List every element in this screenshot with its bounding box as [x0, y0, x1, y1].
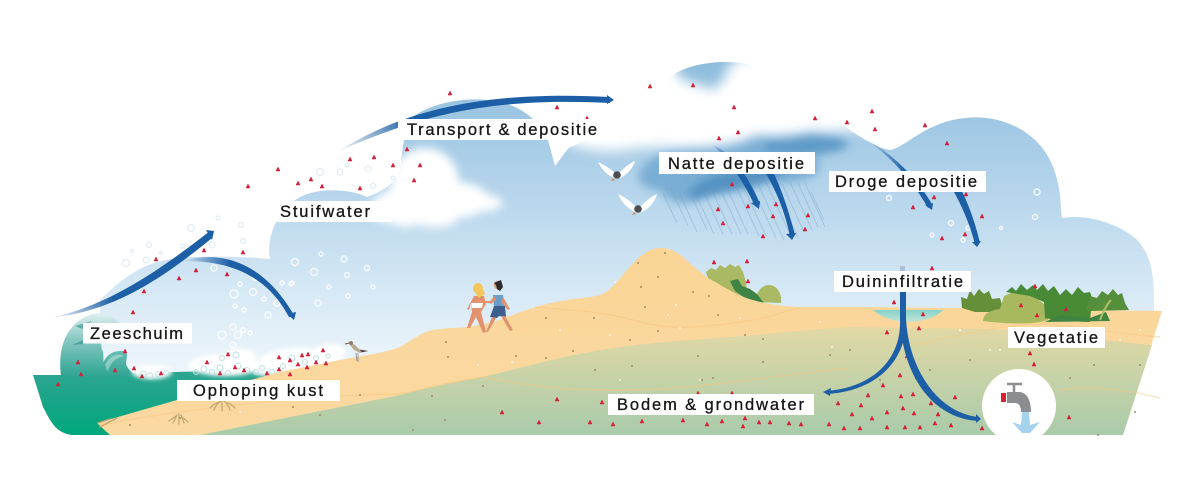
woman	[467, 283, 492, 333]
sea foam on shore	[132, 344, 346, 379]
label: Zeeschuim: Zeeschuim	[90, 325, 183, 343]
rain	[663, 182, 825, 240]
soil layer	[200, 327, 1152, 435]
label: Droge depositie: Droge depositie	[835, 173, 977, 191]
label: Bodem & grondwater: Bodem & grondwater	[617, 396, 804, 414]
tap icon in white circle	[982, 369, 1056, 435]
label: Stuifwater: Stuifwater	[280, 203, 370, 221]
sand and soil grains	[130, 253, 1140, 435]
arrow: dry deposition 1	[867, 140, 933, 210]
sky panel	[100, 62, 1154, 380]
bird: avocet on beach	[345, 341, 368, 362]
arrow: foam falling on shore	[183, 257, 296, 320]
dune bush	[706, 264, 781, 303]
arrow: dry deposition 2	[950, 185, 981, 247]
cloud: dark rain cloud	[639, 128, 848, 203]
white notch under transport label	[548, 140, 573, 166]
label: Duininfiltratie: Duininfiltratie	[842, 273, 963, 291]
label: Stuifwater	[272, 201, 392, 222]
red foam particles	[56, 83, 1071, 430]
right vegetation	[961, 284, 1129, 324]
arrow: wet deposition 1	[713, 145, 760, 209]
sea	[33, 369, 280, 435]
man	[486, 280, 513, 332]
label: Ophoping kust: Ophoping kust	[193, 382, 323, 400]
label: Natte depositie: Natte depositie	[668, 155, 804, 173]
label: Vegetatie: Vegetatie	[1014, 329, 1098, 347]
pond	[873, 310, 943, 322]
sediment contour lines	[100, 307, 1160, 425]
arrow: wet deposition 2	[765, 172, 796, 240]
arrow: spray rising from wave	[50, 230, 214, 318]
arrow: long-range transport	[337, 95, 614, 152]
label: Ophoping kust	[177, 380, 340, 401]
seagull 1	[598, 161, 635, 181]
wave	[60, 313, 140, 376]
label: Transport & depositie: Transport & depositie	[407, 121, 597, 139]
arrow: infiltration to groundwater	[823, 266, 981, 423]
seagull 2	[618, 194, 657, 215]
people walking on dune	[467, 280, 513, 333]
cloud: left white cumulus	[371, 148, 502, 227]
spray droplets	[122, 163, 395, 266]
cloud: large white cumulus	[550, 54, 870, 151]
sand body	[97, 248, 1162, 435]
seagrass tufts	[98, 400, 235, 427]
